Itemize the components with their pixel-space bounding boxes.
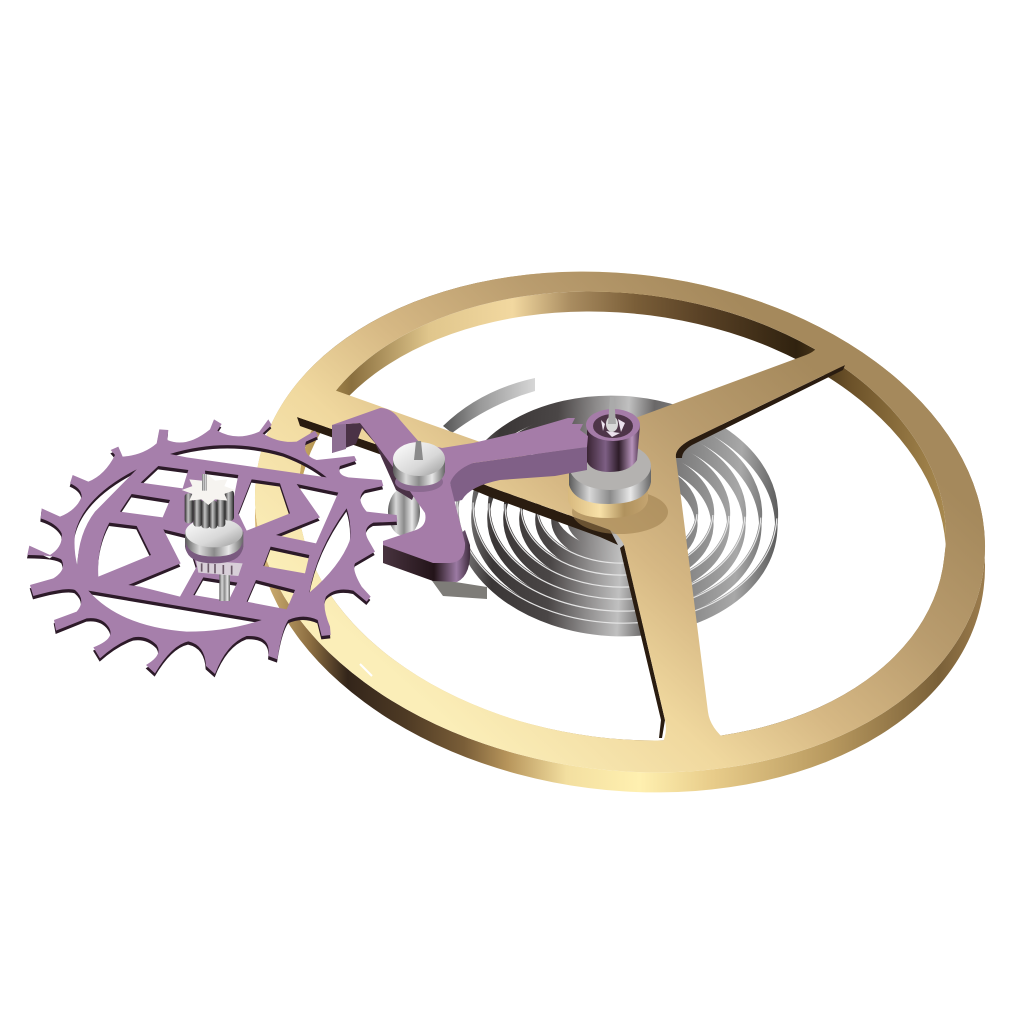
upper left wall	[332, 423, 420, 500]
lower pinion	[196, 560, 243, 576]
collar body	[185, 532, 243, 561]
balance staff collar	[606, 416, 618, 432]
spring coils	[451, 389, 783, 643]
purple stud body	[587, 425, 640, 472]
purple stud top	[586, 409, 640, 441]
hub shadow	[572, 490, 668, 534]
rim top surface	[255, 272, 985, 772]
rim inner wall	[298, 291, 946, 761]
balance wheel spokes	[297, 336, 858, 755]
lower pivot roller	[388, 488, 420, 536]
collar top	[185, 518, 243, 547]
pallet lever	[332, 408, 588, 599]
pinion star top	[182, 475, 235, 505]
pivot ring	[395, 472, 443, 492]
spoke walls	[297, 365, 845, 738]
fork tip wall reflection	[332, 423, 346, 453]
escape wheel	[27, 419, 397, 677]
lever surface	[332, 408, 588, 563]
balance wheel rim	[255, 272, 985, 792]
spring outer curl	[443, 378, 535, 433]
purple band	[186, 542, 243, 563]
rim outer wall	[255, 272, 985, 792]
silver collar	[569, 465, 651, 504]
stud reflections	[601, 419, 625, 437]
pinion leaves	[185, 490, 234, 529]
pivot cylinder	[393, 458, 445, 486]
stud recess	[593, 414, 633, 438]
lower shaft	[219, 572, 230, 601]
wheel thickness	[27, 423, 397, 677]
pinion shaft tip	[202, 474, 207, 491]
pivot cap	[393, 442, 445, 476]
fork lower wall	[383, 530, 470, 582]
wheel surface	[27, 419, 397, 674]
spoke surface	[297, 336, 858, 755]
spring highlights	[451, 502, 777, 631]
lower pinion leaves	[202, 563, 232, 575]
lower silver plate	[430, 578, 487, 599]
balance staff pin	[608, 397, 616, 424]
silver ring top	[569, 442, 651, 490]
hairspring	[443, 378, 783, 643]
rim glint	[360, 664, 372, 676]
central post on the balance	[568, 397, 651, 518]
pivot pin	[414, 441, 423, 460]
lever underside wall	[450, 447, 587, 502]
gold cylinder	[568, 478, 648, 518]
